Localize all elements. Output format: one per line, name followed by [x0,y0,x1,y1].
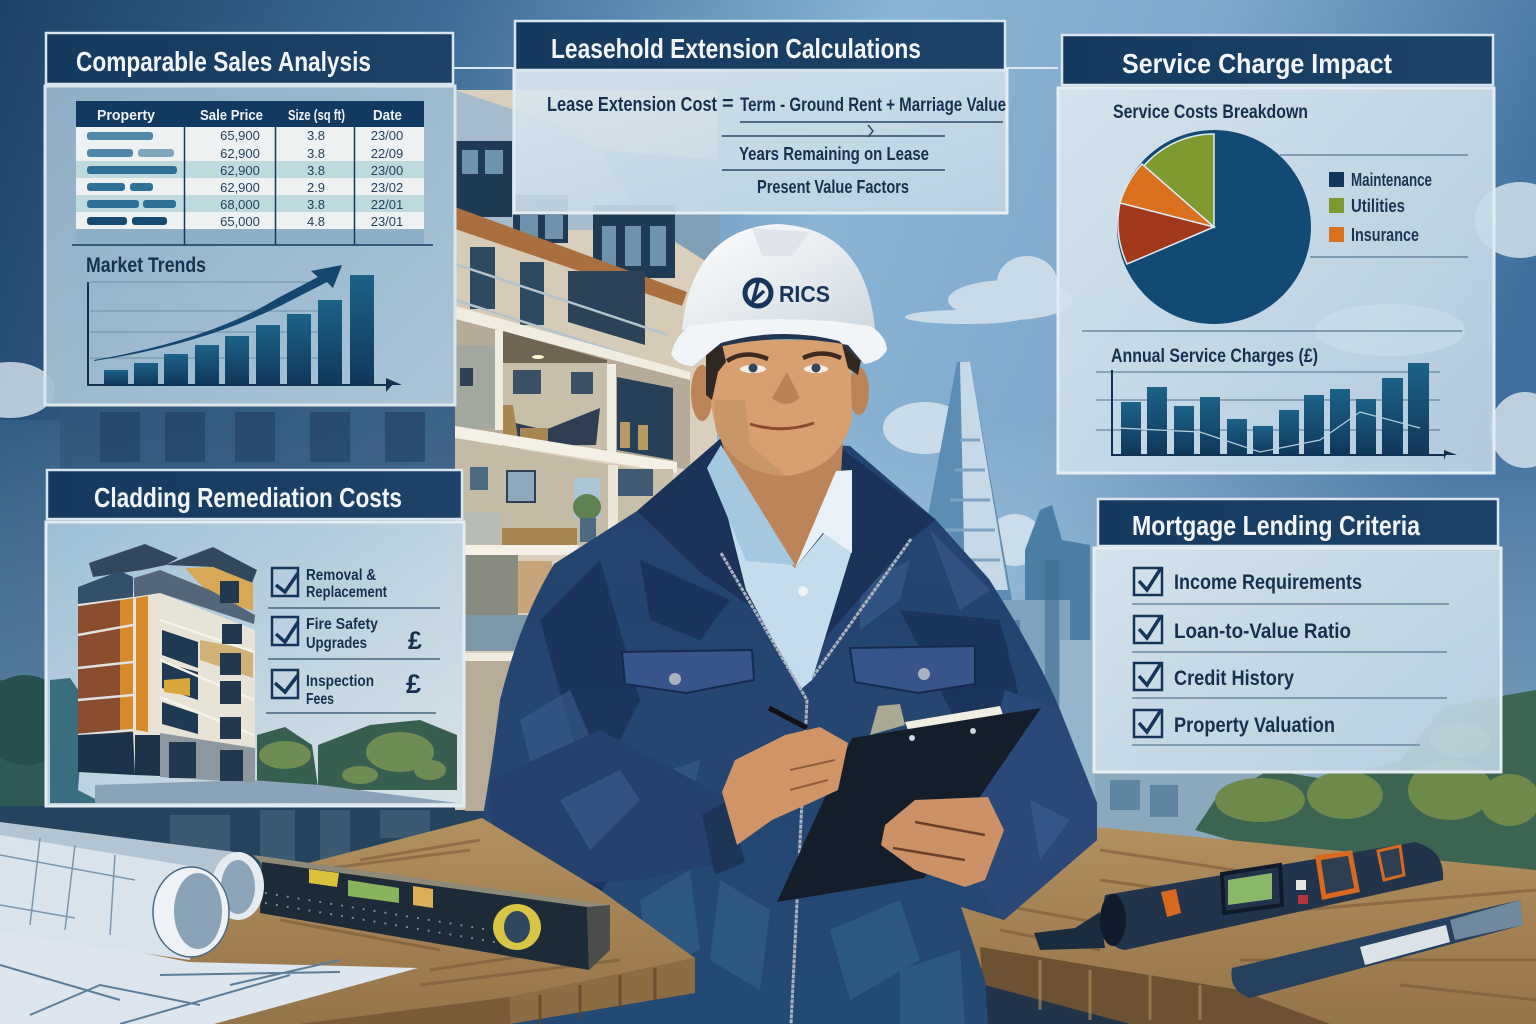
heading: Cladding Remediation Costs [94,482,402,513]
heading: Comparable Sales Analysis [76,46,371,77]
check item: income requirements [1134,568,1362,595]
person: surveyor [478,224,1097,1024]
ears [691,365,869,421]
roof blocks [89,544,178,577]
sales table: 23/02 [371,180,403,195]
check item: fire safety upgrades [272,616,422,655]
pie legend: Insurance [1351,225,1419,245]
sales table: 3.8 [307,128,325,143]
illustration: laser measuring device [1034,842,1443,950]
pockets [622,650,754,693]
pie chart [1117,130,1311,324]
blueprint sheet [0,925,418,1024]
sales table: 62,900 [220,163,260,178]
market trends heading: Market Trends [86,254,206,277]
wood band [455,207,687,306]
illustration: apartment building [455,90,720,811]
check item: income requirements: Income Requirements [1174,571,1362,594]
sales table: Sale Price [200,107,263,124]
wooden table left [0,818,695,1024]
sales table: Date [373,107,402,124]
heading: Service Charge Impact [1122,48,1392,79]
sales table: Property [97,107,156,124]
sales table: 23/01 [371,214,403,229]
panel: comparable sales analysis [45,33,455,405]
check item: inspection fees: Fees [306,691,334,708]
illustration: pen device [1231,900,1523,998]
pie legend [1329,170,1432,245]
formula: Present Value Factors [757,177,909,197]
balconies [162,630,198,734]
shirt [721,490,852,690]
sales table: 3.8 [307,146,325,161]
heading [46,33,453,84]
sales table: 62,900 [220,180,260,195]
clipboard [777,704,1041,902]
check item: fire safety upgrades: Upgrades [306,635,367,652]
trees and ground [50,678,457,803]
wooden table right [960,820,1536,1024]
formula [547,93,1006,197]
helmet logo: RICS [779,281,830,307]
helmet [682,224,875,330]
helmet logo [745,280,830,307]
sales table: 62,900 [220,146,260,161]
face [710,340,852,476]
check item: loan to value ratio: Loan-to-Value Ratio [1174,620,1351,643]
market trends chart [88,265,402,392]
face shading [714,400,786,476]
sales table: 3.8 [307,163,325,178]
panel: service charge impact [1058,35,1494,473]
sales table: 3.8 [307,197,325,212]
panel: cladding remediation costs [46,470,464,806]
formula: Term - Ground Rent + Marriage Value [740,95,1006,116]
icon: clad building [78,544,257,783]
check item: removal and replacement: Replacement [306,584,388,601]
sales table: 65,900 [220,128,260,143]
formula: Lease Extension Cost [547,94,717,116]
zip [721,539,911,1024]
check item: removal and replacement: Removal & [306,567,376,584]
helmet brim [671,319,887,366]
check item: property valuation: Property Valuation [1174,714,1335,737]
eyes and brows [727,354,841,373]
shirt collars [707,445,795,565]
hand with pen [722,708,848,845]
check item: property valuation [1134,710,1335,737]
lower room floor [455,438,640,545]
background: distant buildings left [0,405,490,896]
check item: inspection fees [272,669,421,708]
annual service charges chart [1096,363,1457,460]
sales table: 68,000 [220,197,260,212]
illustration: city skyline with shard tower [912,362,1536,842]
service costs breakdown heading: Service Costs Breakdown [1113,102,1308,123]
check item: loan to value ratio [1134,616,1351,643]
sales table: 22/01 [371,197,403,212]
sales table: Size (sq ft) [288,107,345,124]
jacket shading [497,530,1050,1024]
illustration: spirit level [253,855,610,970]
pie legend: Maintenance [1351,170,1432,190]
check item: inspection fees: Inspection [306,673,374,690]
formula: = [722,93,734,115]
jacket [478,439,1097,1024]
panel: leasehold extension calculations [514,21,1007,213]
sales table: 23/00 [371,163,403,178]
sales table: 4.8 [307,214,325,229]
background trees right [1195,690,1536,880]
panel: mortgage lending criteria [1094,499,1501,772]
sales table [72,101,433,245]
illustration: rolled blueprints [0,822,418,1024]
sales table: 23/00 [371,128,403,143]
formula: Years Remaining on Lease [739,144,929,164]
pie legend: Utilities [1351,196,1405,216]
brick facade [78,585,133,755]
collar [637,439,800,640]
check item: fire safety upgrades: Fire Safety [306,616,378,633]
nose and mouth [772,372,800,404]
heading: Leasehold Extension Calculations [551,33,921,64]
check item: fire safety upgrades: £ [408,627,422,655]
sales table: 2.9 [307,180,325,195]
heading [47,470,462,519]
sleeves [490,690,1097,920]
check item: credit history [1134,663,1294,690]
heading [515,21,1005,70]
heading: Mortgage Lending Criteria [1132,510,1420,541]
check item: credit history: Credit History [1174,667,1294,690]
sales table: 65,000 [220,214,260,229]
check item: removal and replacement [272,567,388,601]
connectors [453,67,1058,69]
hair [706,344,862,400]
sales table: 22/09 [371,146,403,161]
annual service charges heading: Annual Service Charges (£) [1111,346,1318,367]
open room floor [455,319,690,470]
roof [455,90,690,230]
heading [1098,499,1498,546]
checklist [266,567,440,713]
neck [721,440,843,568]
hand on clipboard [881,797,1004,887]
check item: inspection fees: £ [406,669,421,699]
heading [1062,35,1493,85]
